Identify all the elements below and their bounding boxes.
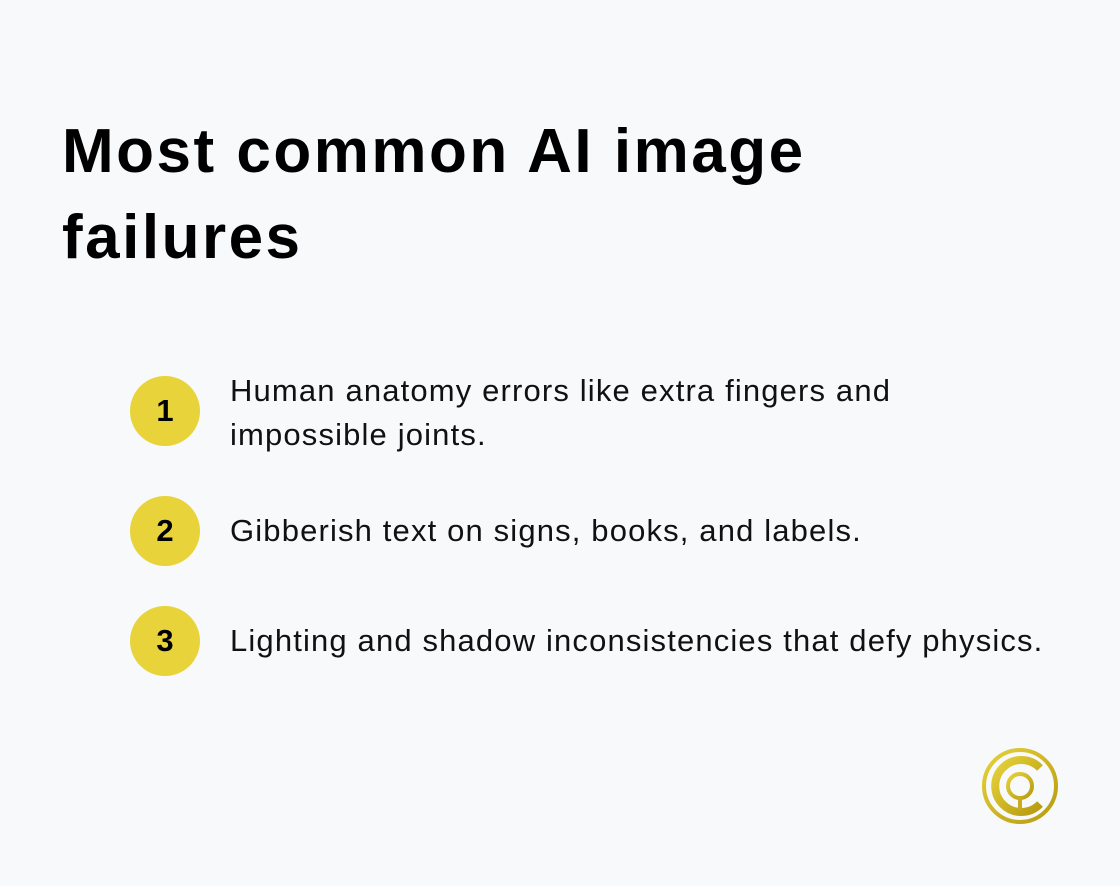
item 2 xyxy=(130,496,862,566)
text 1: Human anatomy errors like extra fingers and xyxy=(230,373,891,408)
text 1: impossible joints. xyxy=(230,417,487,452)
badge 3: 3 xyxy=(156,623,174,658)
badge 3 xyxy=(130,606,200,676)
logo xyxy=(982,748,1058,824)
text 1 xyxy=(230,373,891,452)
item 3 xyxy=(130,606,1043,676)
badge 1: 1 xyxy=(156,393,174,428)
title xyxy=(62,117,806,272)
title: Most common AI image xyxy=(62,117,806,186)
badge 1 xyxy=(130,376,200,446)
item 1 xyxy=(130,373,891,452)
text 3: Lighting and shadow inconsistencies that defy physics. xyxy=(230,623,1043,658)
text 2: Gibberish text on signs, books, and labels. xyxy=(230,513,862,548)
badge 2: 2 xyxy=(156,513,174,548)
title: failures xyxy=(62,203,303,272)
badge 2 xyxy=(130,496,200,566)
